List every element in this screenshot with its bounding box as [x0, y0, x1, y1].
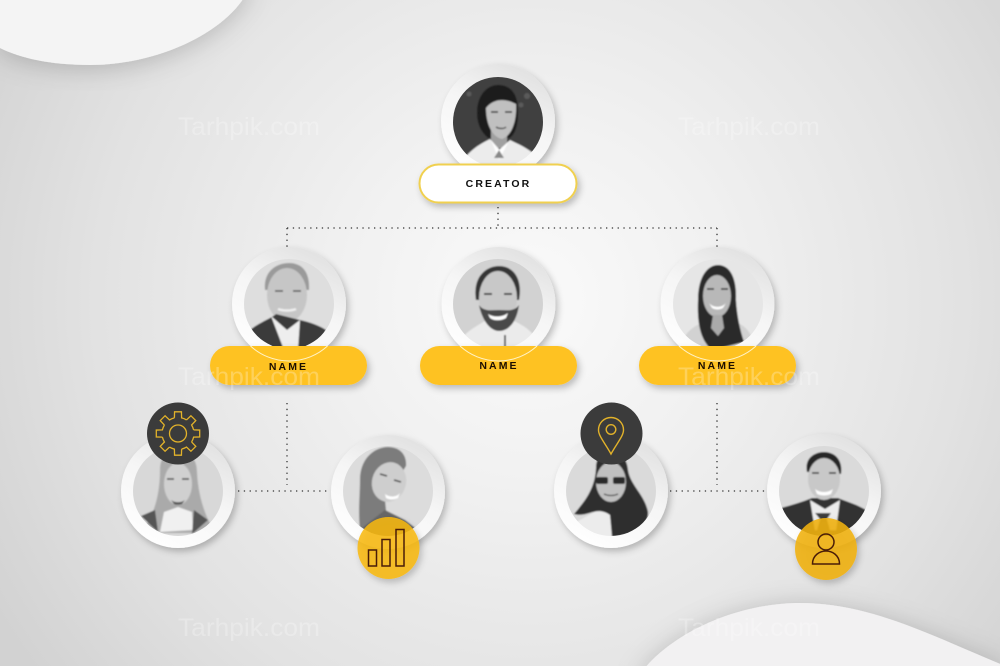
node: team member with location icon — [554, 402, 668, 548]
pill label — [639, 346, 796, 385]
label text: NAME — [479, 360, 519, 372]
photo: creator — [453, 77, 543, 164]
pill label — [210, 346, 367, 385]
icon: bar chart — [358, 517, 420, 579]
dotted connector lines — [238, 207, 765, 491]
ring edge over pill — [679, 346, 756, 361]
photo: woman with glasses — [566, 453, 656, 536]
watermarks: Tarhpik.com — [678, 614, 820, 642]
avatar ring: creator — [441, 64, 555, 178]
label text: creator: CREATOR — [466, 178, 531, 190]
watermarks: Tarhpik.com — [678, 113, 820, 141]
icon: person — [795, 518, 857, 580]
avatar ring — [767, 434, 881, 548]
avatar ring — [554, 434, 668, 548]
node: left manager — [210, 247, 367, 385]
photo: blonde woman — [133, 453, 223, 536]
photo: older man — [244, 259, 334, 346]
avatar ring — [660, 247, 774, 361]
photo: smiling woman — [343, 446, 433, 536]
watermarks: Tarhpik.com — [178, 113, 320, 141]
icon: gear — [147, 402, 209, 464]
ring edge over pill — [250, 346, 328, 361]
pill label: creator — [420, 164, 576, 202]
avatar ring — [442, 247, 556, 361]
node: team member with gear icon — [121, 402, 235, 548]
photo: long-haired woman — [673, 264, 763, 346]
label text: NAME — [269, 361, 308, 373]
node: right manager — [639, 247, 796, 385]
photo: bearded man — [453, 259, 543, 346]
decorative blob: top left — [0, 0, 252, 65]
photo: man in suit — [779, 446, 869, 536]
label text: NAME — [698, 360, 737, 372]
decorative blob: bottom right — [636, 603, 1000, 666]
avatar ring — [331, 435, 445, 549]
node: creator — [420, 64, 576, 202]
avatar ring — [121, 434, 235, 548]
icon: location pin — [580, 402, 642, 464]
watermarks: Tarhpik.com — [178, 363, 320, 391]
ring edge over pill — [460, 346, 537, 361]
watermarks: Tarhpik.com — [678, 363, 820, 391]
pill label — [420, 346, 577, 385]
node: team member with bar chart icon — [331, 435, 445, 579]
watermarks — [178, 113, 820, 642]
watermarks: Tarhpik.com — [178, 614, 320, 642]
avatar ring — [232, 247, 346, 361]
node: center manager — [420, 247, 577, 385]
node: team member with person icon — [767, 434, 881, 580]
